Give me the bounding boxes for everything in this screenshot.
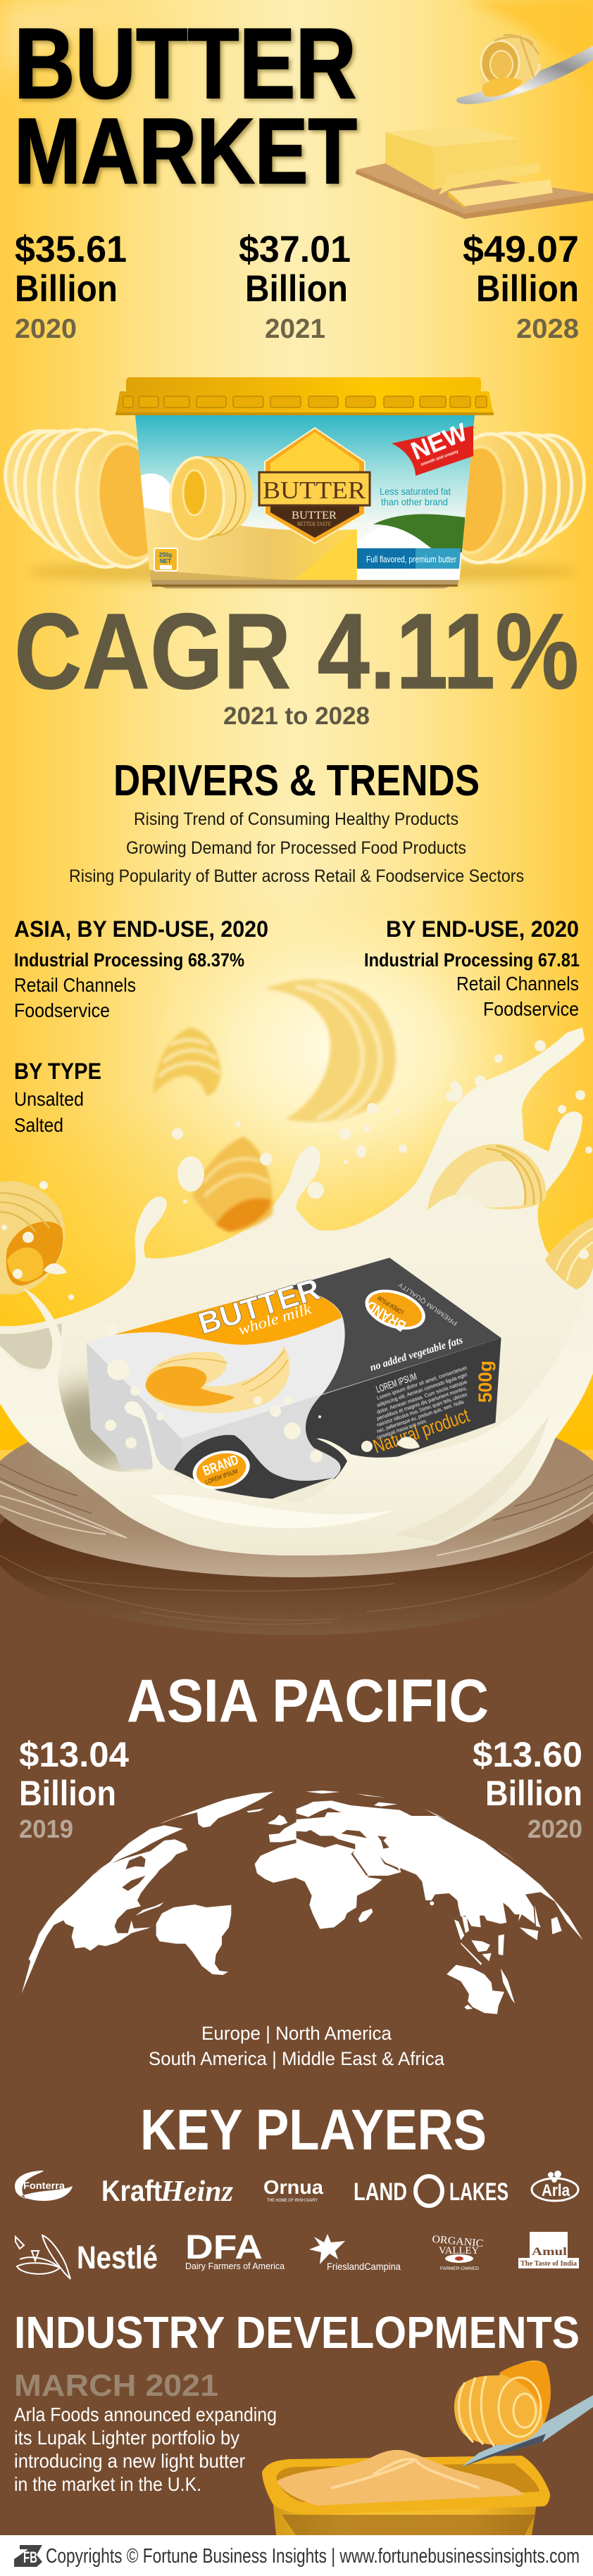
stat: Asia Pacific 2019: Billion xyxy=(19,1774,116,1813)
illustration: falling butter curls xyxy=(0,1137,593,1294)
label: new flag: NEW xyxy=(407,417,471,465)
CAGR period: 2021 to 2028 xyxy=(223,702,370,730)
logo: Organic Valley: VALLEY xyxy=(439,2245,479,2256)
section: drivers and trends xyxy=(69,757,524,886)
logo: KraftHeinz: Heinz xyxy=(160,2176,234,2208)
segment: global by end-use: Foodservice xyxy=(483,998,579,1020)
box text: nec, pellentesque eu, pretium quis, sem. Nulla xyxy=(376,1399,465,1434)
logo: Amul: Amul xyxy=(532,2246,568,2258)
map: Eurasia, Africa and Australia xyxy=(296,1791,583,2014)
stat: Asia Pacific 2019 xyxy=(19,1735,129,1843)
logo: Fonterra xyxy=(15,2171,73,2201)
box left end xyxy=(86,1343,185,1470)
segment: by type: Salted xyxy=(14,1114,63,1136)
box text xyxy=(194,1273,496,1486)
stat: 2028 market size xyxy=(463,229,579,344)
stat: 2021 market size xyxy=(239,229,351,344)
text block: development description: its Lupak Lighter portfolio by xyxy=(14,2427,239,2449)
box text: nascetur ridiculus mus. Donec quam felis, ultricies xyxy=(376,1391,468,1428)
box text: 500g xyxy=(475,1360,496,1403)
logo: Ornua: Ornua xyxy=(263,2176,323,2198)
logo: Fonterra: Fonterra xyxy=(23,2180,65,2191)
illustration: milk splash front xyxy=(0,1268,593,1555)
label: weight badge: NET xyxy=(160,558,171,564)
logo: DFA xyxy=(185,2229,285,2271)
logo: Arla xyxy=(532,2171,578,2201)
text block: development description: introducing a new light butter xyxy=(14,2450,245,2472)
stat: 2028 market size: $49.07 xyxy=(463,229,579,270)
heading: Asia Pacific: ASIA PACIFIC xyxy=(127,1667,489,1735)
segment: global by end-use xyxy=(364,916,580,1020)
logo: Nestle xyxy=(15,2235,70,2279)
stat: 2020 market size: $35.61 xyxy=(15,229,127,270)
logo: butter hexagon badge: BUTTER xyxy=(263,476,366,504)
segment: by type: Unsalted xyxy=(14,1088,84,1110)
label: weight badge: 250g xyxy=(159,552,172,558)
text block: development description: Arla Foods announced expanding xyxy=(14,2404,277,2425)
logo: DFA: DFA xyxy=(185,2229,263,2266)
logo: Land O Lakes xyxy=(354,2176,508,2206)
icon: butter curl on knife xyxy=(456,34,593,104)
logo: KraftHeinz: Kraft xyxy=(101,2174,162,2207)
label: full flavored band xyxy=(357,548,461,569)
illustration: milk splash back xyxy=(0,1028,593,1555)
tub body label xyxy=(135,415,475,588)
milk droplets xyxy=(1,1040,592,1463)
box text: whole milk xyxy=(236,1299,314,1339)
box oval bottom xyxy=(186,1444,257,1496)
label text: less saturated fat: Less saturated fat xyxy=(380,486,451,497)
illustration: butter tub xyxy=(116,377,494,588)
world map globe xyxy=(22,1791,583,2014)
stat: 2020 market size: 2020 xyxy=(15,314,77,344)
list: drivers: Growing Demand for Processed Food Products xyxy=(126,838,466,858)
box orange banner xyxy=(113,1289,342,1345)
list: other regions xyxy=(149,2023,445,2069)
segment: global by end-use: Retail Channels xyxy=(456,973,579,995)
list: drivers: Rising Popularity of Butter across Retail & Foodservice Sectors xyxy=(69,866,524,886)
stat: 2020 market size: Billion xyxy=(15,268,118,310)
logo: Land O Lakes: LAKES xyxy=(449,2178,508,2206)
stat: Asia Pacific 2020: 2020 xyxy=(528,1814,582,1843)
box text: LOREM IPSUM xyxy=(204,1467,239,1486)
label: new flag: smooth and creamy xyxy=(420,450,460,467)
heading: drivers and trends: DRIVERS & TRENDS xyxy=(113,757,480,805)
box text: BRAND xyxy=(363,1297,409,1335)
segment: Asia by end-use: Retail Channels xyxy=(14,974,136,996)
logo: butter hexagon badge: BETTER TASTE xyxy=(297,521,331,527)
segment: Asia by end-use: Industrial Processing 68.37% xyxy=(14,949,244,971)
box text: PREMIUM QUALITY xyxy=(397,1281,458,1327)
milk interior band at left xyxy=(0,1323,62,1369)
stat: 2021 market size: Billion xyxy=(245,268,348,310)
box dark bottom wave xyxy=(174,1435,333,1498)
logos: key players xyxy=(15,2171,579,2279)
logo: Organic Valley: FARMER-OWNED xyxy=(440,2266,479,2271)
text block: development description xyxy=(14,2404,277,2495)
title: Butter Market xyxy=(14,8,357,203)
logo: Amul xyxy=(518,2232,579,2268)
stat: 2021 market size: 2021 xyxy=(265,314,325,344)
stat: Asia Pacific 2019: 2019 xyxy=(19,1814,73,1843)
stat: Asia Pacific 2020: $13.60 xyxy=(473,1735,582,1774)
stat: Asia Pacific 2020 xyxy=(473,1735,582,1843)
box top face xyxy=(86,1258,501,1439)
box text: BRAND xyxy=(201,1452,241,1479)
date: March 2021: MARCH 2021 xyxy=(14,2368,218,2403)
logo: Land O Lakes: LAND xyxy=(354,2178,407,2206)
logo: Amul: The Taste of India xyxy=(520,2260,577,2268)
label: full flavored band: Full flavored, premium butter xyxy=(366,554,457,564)
logo: DFA: Dairy Farmers of America xyxy=(185,2261,285,2271)
logo: Fortune Business Insights: FB xyxy=(23,2549,37,2566)
list: drivers: Rising Trend of Consuming Healthy Products xyxy=(134,809,458,829)
box text: Lorem ipsum dolor sit amet, consectetuer xyxy=(376,1364,468,1401)
logo: Organic Valley xyxy=(432,2234,484,2271)
segment: by type: BY TYPE xyxy=(14,1059,101,1084)
illustration: wooden disc xyxy=(0,1397,593,1635)
tub lid xyxy=(116,377,494,415)
segment: Asia by end-use: ASIA, BY END-USE, 2020 xyxy=(14,916,268,942)
list: other regions: Europe | North America xyxy=(201,2023,392,2044)
logo: FrieslandCampina: FrieslandCampina xyxy=(327,2261,401,2272)
stat: 2028 market size: 2028 xyxy=(516,314,579,344)
stat: 2028 market size: Billion xyxy=(476,268,579,310)
heading: key players: KEY PLAYERS xyxy=(140,2098,487,2162)
box text: LOREM IPSUM xyxy=(375,1370,418,1395)
segment: by type xyxy=(14,1059,101,1136)
title: Butter Market: BUTTER xyxy=(14,8,356,120)
logo: Organic Valley: ORGANIC xyxy=(432,2234,484,2249)
logo: Arla: Arla xyxy=(542,2181,570,2200)
box text: dolor. Aenean massa. Cum sociis natoque xyxy=(376,1378,468,1415)
box front face xyxy=(174,1338,501,1498)
box text: BUTTER xyxy=(194,1273,324,1341)
illustration: butter rolls behind tub xyxy=(0,424,590,584)
label: new flag xyxy=(392,417,473,476)
label: weight badge xyxy=(154,548,177,571)
list: drivers xyxy=(69,809,524,886)
footer xyxy=(0,2535,593,2576)
title: Butter Market: MARKET xyxy=(14,99,357,203)
box text: LOREM IPSUM xyxy=(376,1294,405,1316)
illustration: butter box xyxy=(86,1258,501,1498)
box oval top xyxy=(357,1282,434,1338)
box text: Natural product xyxy=(370,1404,472,1458)
logo: Fortune Business Insights xyxy=(14,2545,42,2567)
logo: Nestle wordmark: Nestlé xyxy=(77,2240,158,2275)
box text: no added vegetable fats xyxy=(368,1334,464,1374)
logo: butter hexagon badge xyxy=(259,428,370,543)
box curl xyxy=(146,1346,289,1413)
icon: butter block on wooden board xyxy=(356,126,593,219)
icon: butter roll on label xyxy=(170,457,253,539)
segment: Asia by end-use xyxy=(14,916,268,1021)
label text: less saturated fat xyxy=(380,486,451,507)
stat: Asia Pacific 2020: Billion xyxy=(485,1774,582,1813)
label text: less saturated fat: than other brand xyxy=(381,496,448,507)
stat: 2020 market size xyxy=(15,229,127,344)
illustration: butter tub with knife and curl xyxy=(262,2361,593,2535)
box dark front panel xyxy=(306,1338,501,1479)
stat: 2021 market size: $37.01 xyxy=(239,229,351,270)
segment: Asia by end-use: Foodservice xyxy=(14,999,110,1021)
illustration: blurred butter curls xyxy=(153,979,396,1122)
box dark top panel xyxy=(280,1258,501,1395)
logo: KraftHeinz xyxy=(101,2174,234,2208)
segment: global by end-use: BY END-USE, 2020 xyxy=(386,916,579,942)
logo: butter hexagon badge: BUTTER xyxy=(292,510,337,522)
box text: consequat massa quis enim. xyxy=(376,1418,428,1441)
logo: Ornua: THE HOME OF IRISH DAIRY xyxy=(267,2199,318,2203)
map: Americas and west Africa xyxy=(22,1792,296,1994)
milk interior shadow xyxy=(42,1387,141,1471)
stat: Asia Pacific 2019: $13.04 xyxy=(19,1735,129,1774)
box text: penatibus et magnis dis parturient montes, xyxy=(376,1384,468,1422)
logo: FrieslandCampina xyxy=(309,2234,401,2272)
list: other regions: South America | Middle East & Africa xyxy=(149,2048,445,2069)
box text: adipiscing elit. Aenean commodo ligula eget xyxy=(376,1371,468,1408)
text block: development description: in the market in the U.K. xyxy=(14,2473,201,2495)
